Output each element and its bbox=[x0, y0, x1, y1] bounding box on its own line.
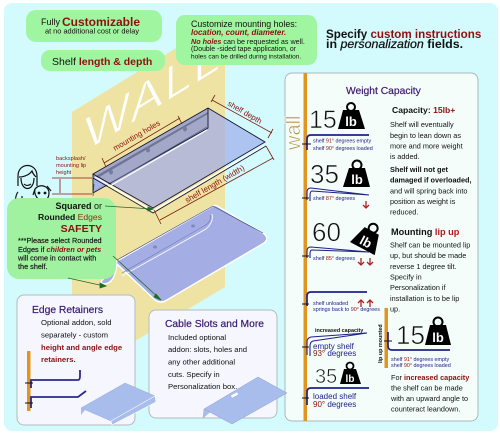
wall bbox=[72, 18, 225, 379]
text: mounting lip up: Mounting lip up bbox=[391, 227, 460, 237]
bracket: 15 lb: shelf 90° degrees loaded bbox=[313, 146, 373, 152]
text: capacity: begin to lean down as bbox=[390, 131, 461, 140]
panel: cable slots: cuts. Specify in bbox=[168, 370, 220, 379]
panel: edge retainers: Edge Retainers bbox=[32, 305, 103, 316]
panel: weight capacity bbox=[283, 73, 478, 421]
weight: 35 lb: lb bbox=[351, 172, 363, 187]
box: fully customizable bbox=[26, 10, 162, 42]
lip up mounted example bbox=[378, 308, 451, 369]
weight capacity title: Weight Capacity bbox=[346, 86, 422, 97]
lip up mounted example: shelf 91° degrees empty bbox=[391, 357, 450, 363]
text: increased capacity: the shelf can be made bbox=[391, 384, 463, 392]
panel: cable slots: any other additional bbox=[168, 358, 235, 366]
box: mounting holes bbox=[176, 15, 317, 65]
bracket: 87 degrees bbox=[302, 188, 369, 208]
wall label: wall bbox=[283, 116, 305, 151]
panel: edge retainers: separately - custom bbox=[41, 330, 108, 340]
weight: 35 lb small: 35 bbox=[315, 366, 337, 388]
lower rounded shelf bbox=[101, 206, 267, 302]
lip up mounted example: lip up mounted bbox=[378, 324, 384, 363]
box: mounting holes: Customize mounting holes: bbox=[191, 19, 297, 29]
bracket: loaded shelf bbox=[302, 388, 369, 409]
panel: edge retainers: Optional addon, sold bbox=[41, 318, 112, 327]
back lip bbox=[93, 108, 208, 193]
text: mounting lip up: reverse 1 degree tilt. bbox=[390, 262, 457, 271]
bracket: 15 lb: shelf 91° degrees empty bbox=[313, 138, 372, 144]
text: mounting lip up: up, but should be made bbox=[390, 251, 466, 260]
box: fully customizable: Fully bbox=[41, 17, 61, 27]
box: shelf length and depth: Shelf length & depth bbox=[52, 56, 152, 68]
lip up mounted example: 15 bbox=[396, 320, 425, 350]
shelf length dimension bbox=[154, 146, 274, 224]
weight: 15 lb bbox=[309, 103, 365, 134]
bracket: unloaded: shelf unloaded bbox=[313, 301, 348, 307]
panel: edge retainers: height and angle edge bbox=[41, 343, 123, 352]
bracket: loaded shelf: 90° degrees bbox=[313, 400, 356, 409]
text: capacity: damaged if overloaded, bbox=[390, 176, 472, 185]
box: fully customizable: at no additional cost or delay bbox=[45, 26, 139, 36]
lip up mounted example: shelf 90° degrees loaded bbox=[391, 363, 451, 369]
text: mounting lip up: Shelf can be mounted lip bbox=[390, 240, 470, 250]
bracket: unloaded bbox=[302, 292, 380, 313]
shelf depth dimension bbox=[211, 95, 273, 138]
weight: 60 lb: lb bbox=[357, 233, 375, 251]
text: capacity: is added. bbox=[390, 152, 420, 161]
text: capacity: reduced. bbox=[390, 208, 418, 217]
panel: cable slots: Cable Slots and More bbox=[165, 319, 264, 330]
text: capacity: position as weight is bbox=[390, 197, 456, 206]
callout: safety: the shelf. bbox=[18, 262, 48, 271]
text: capacity: Capacity: 15lb+ bbox=[392, 105, 455, 115]
text: increased capacity: counteract leandown. bbox=[391, 404, 460, 414]
girl and dog icon bbox=[15, 166, 51, 208]
text: mounting lip up: installation is to be lip bbox=[390, 294, 459, 303]
box: mounting holes: No holes can be requested as well. bbox=[191, 37, 305, 46]
text: mounting lip up: up. bbox=[390, 304, 400, 314]
bracket: increased capacity bbox=[302, 328, 367, 358]
green pointer arrows bbox=[68, 184, 161, 300]
icon: slotted shelf bbox=[203, 377, 287, 424]
backsplash label: backsplash/ bbox=[56, 156, 86, 162]
box: fully customizable: Customizable bbox=[62, 15, 140, 29]
panel: cable slots: Personalization box. bbox=[168, 382, 237, 391]
upper shelf illustration bbox=[93, 108, 266, 213]
wall: WALL bbox=[85, 25, 222, 163]
weight: 15 lb: 15 bbox=[309, 106, 337, 134]
box: mounting holes: (Double -sided tape application, or bbox=[191, 46, 297, 53]
bracket: 15 lb bbox=[302, 135, 373, 152]
text: capacity: and will spring back into bbox=[390, 186, 467, 195]
shelf edges bbox=[93, 108, 265, 208]
bracket: 85 degrees bbox=[302, 247, 373, 265]
callout: safety: will come in contact with bbox=[17, 254, 96, 262]
box: shelf length and depth bbox=[41, 50, 165, 71]
panel: cable slots: Included optional bbox=[168, 333, 226, 342]
weight: 35 lb: 35 bbox=[310, 159, 339, 189]
callout: safety: Edges if children or pets bbox=[18, 245, 101, 254]
text: mounting lip up: Personalization if bbox=[390, 283, 447, 292]
panel: edge retainers: retainers. bbox=[41, 355, 76, 364]
backsplash label bbox=[52, 156, 92, 194]
text: mounting lip up: Specify in bbox=[390, 272, 422, 282]
box: mounting holes: holes can be drilled during installation. bbox=[191, 54, 301, 60]
text: increased capacity: with an upward angle to bbox=[390, 394, 468, 403]
text: increased capacity bbox=[390, 373, 470, 414]
bracket: loaded shelf: loaded shelf bbox=[313, 392, 357, 401]
callout: safety bbox=[7, 198, 116, 279]
heading: custom instructions bbox=[326, 28, 481, 51]
lip up mounted example: lb bbox=[432, 330, 444, 345]
text: capacity: more and more weight bbox=[390, 142, 463, 150]
bracket: increased capacity: 93° degrees bbox=[313, 349, 356, 358]
text: increased capacity: For increased capacity bbox=[391, 373, 470, 382]
weight: 60 lb: 60 bbox=[312, 217, 341, 247]
text: capacity bbox=[390, 105, 472, 217]
callout: safety: Rounded Edges bbox=[38, 212, 102, 222]
weight: 35 lb small bbox=[315, 362, 361, 388]
panel: cable slots bbox=[149, 310, 287, 424]
box: mounting holes: location, count, diameter. bbox=[191, 28, 286, 37]
weight: 15 lb: lb bbox=[345, 114, 357, 129]
shelf length dimension: shelf length (width) bbox=[184, 163, 246, 205]
backsplash label: height bbox=[56, 170, 72, 176]
bracket: increased capacity: increased capacity bbox=[315, 328, 363, 334]
callout: safety: Squared or bbox=[55, 201, 102, 211]
bracket: increased capacity: empty shelf bbox=[313, 342, 355, 351]
mounting holes dimension: mounting holes bbox=[112, 118, 162, 153]
heading: custom instructions: in personalization fields. bbox=[326, 37, 463, 51]
mounting holes dimension bbox=[102, 116, 182, 167]
text: capacity: Shelf will eventually bbox=[390, 120, 454, 129]
icon: retainer brackets bbox=[25, 351, 86, 411]
bracket: 87 degrees: shelf 87° degrees bbox=[313, 196, 355, 202]
bracket: 85 degrees: shelf 85° degrees bbox=[313, 256, 355, 262]
backsplash label: mounting lip bbox=[56, 163, 86, 169]
panel: edge retainers bbox=[17, 295, 135, 425]
weight: 60 lb bbox=[312, 217, 388, 255]
shelf depth dimension: shelf depth bbox=[226, 99, 264, 126]
icon: retainer shelf bbox=[81, 383, 156, 425]
panel: cable slots: addon: slots, holes and bbox=[168, 345, 247, 354]
text: capacity: Shelf will not get bbox=[390, 165, 449, 174]
bracket: unloaded: springs back to 90° degrees bbox=[313, 307, 380, 313]
heading: custom instructions: Specify custom instructions bbox=[326, 28, 481, 41]
text: mounting lip up bbox=[390, 227, 470, 314]
weight: 35 lb bbox=[310, 159, 370, 189]
callout: safety: ***Please select Rounded bbox=[18, 236, 102, 245]
weight: 35 lb small: lb bbox=[346, 374, 354, 385]
callout: safety: SAFETY bbox=[61, 223, 102, 235]
shelf floor bbox=[93, 108, 265, 208]
